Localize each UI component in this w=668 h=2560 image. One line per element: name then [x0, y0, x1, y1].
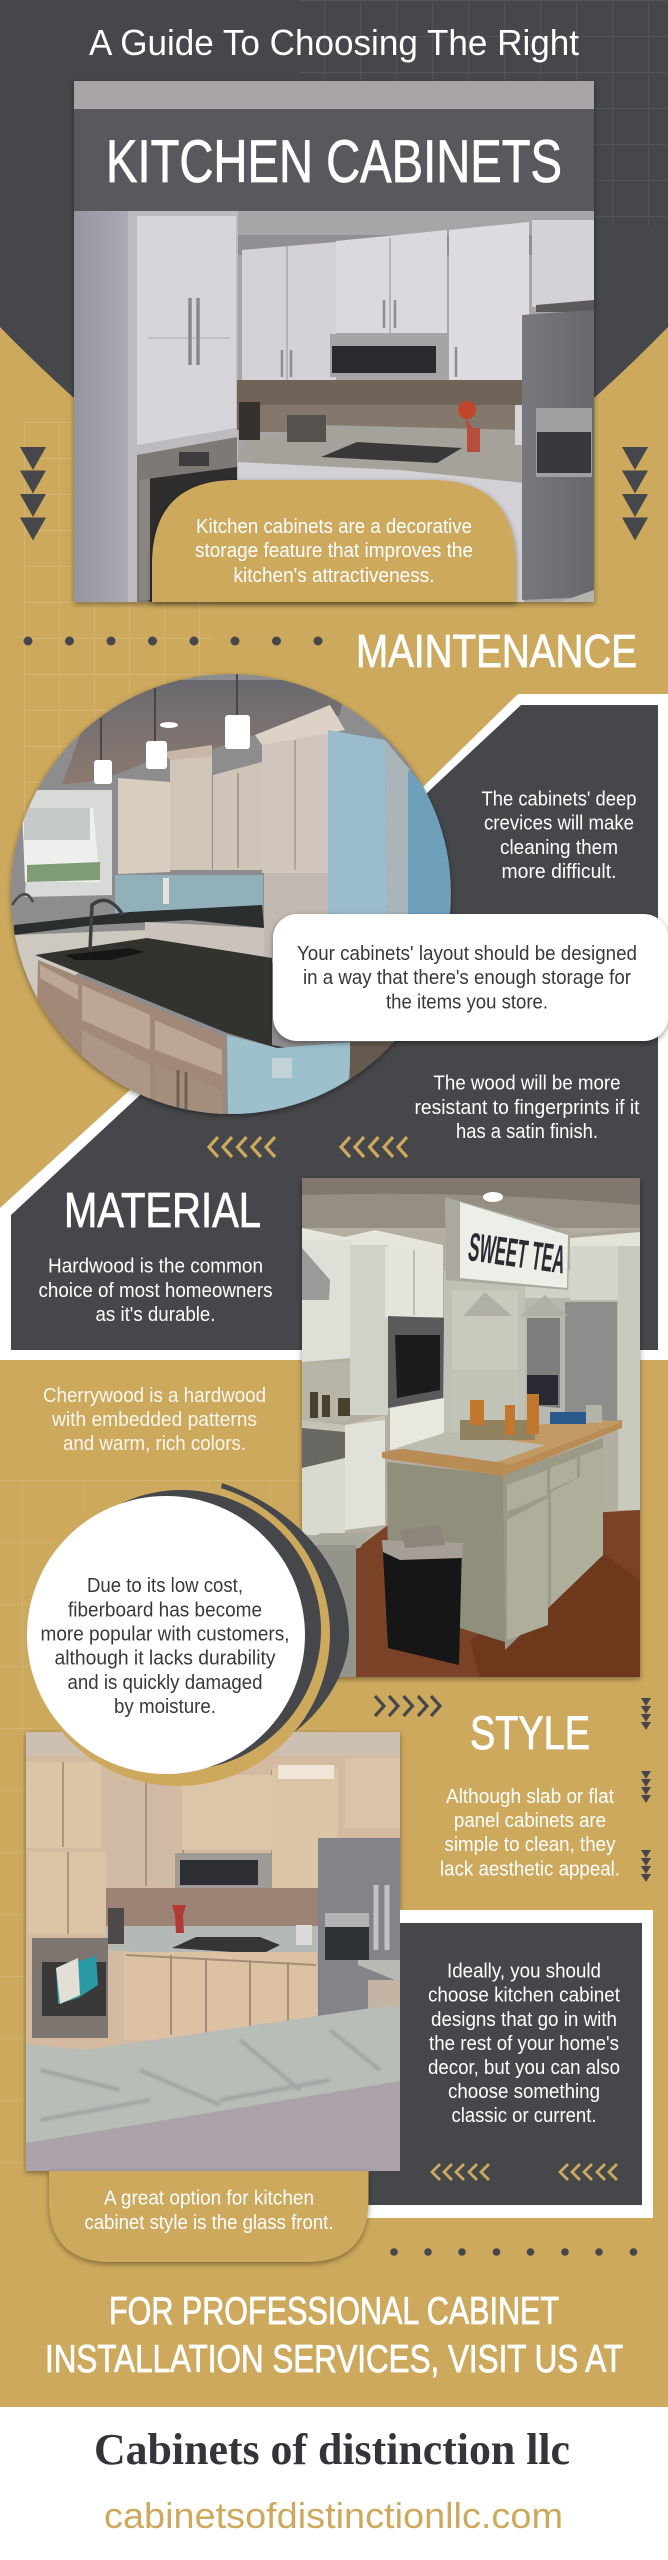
text: satin finish: has a satin finish. — [456, 1121, 598, 1143]
callout: white pill: Your cabinets' layout should be designed — [297, 943, 637, 965]
text: satin finish: The wood will be more — [434, 1073, 620, 1095]
text: deep crevices: crevices will make — [484, 813, 634, 835]
text: ideally: choose something — [448, 2081, 600, 2103]
text: cherrywood — [43, 1385, 266, 1455]
text: deep crevices: more difficult. — [502, 861, 616, 883]
intro pill — [152, 480, 516, 602]
panel: circle crescent gold — [26, 1482, 330, 1786]
text: ideally: Ideally, you should — [447, 1961, 601, 1983]
text: slab panels: simple to clean, they — [444, 1834, 616, 1856]
callout: white pill: the items you store. — [386, 992, 548, 1014]
text: slab panels: Although slab or flat — [446, 1786, 614, 1808]
circle callout: fiberboard: and is quickly damaged — [68, 1672, 262, 1694]
panel: style frame — [362, 1910, 653, 2218]
text: hardwood: Hardwood is the common — [48, 1256, 263, 1278]
panel: dark — [11, 705, 658, 1350]
text: slab panels — [440, 1786, 620, 1880]
text: deep crevices: cleaning them — [500, 837, 618, 859]
callout: white pill: in a way that there's enough storage for — [303, 967, 631, 989]
chevrons: gold in panel 2 — [560, 2164, 617, 2180]
intro pill: kitchen's attractiveness. — [234, 565, 434, 587]
circle callout: fiberboard: more popular with customers, — [40, 1624, 290, 1646]
chevrons: dark right — [375, 1696, 440, 1716]
panel: circle crescent outer dark — [200, 1483, 349, 1733]
footer panel — [0, 2407, 668, 2560]
text: cherrywood: Cherrywood is a hardwood — [43, 1385, 266, 1407]
heading: guide line: A Guide To Choosing The Right — [89, 22, 579, 63]
small triangles stacks — [641, 1698, 651, 1882]
circle callout: fiberboard: although it lacks durability — [54, 1648, 276, 1670]
title band — [74, 109, 594, 211]
call to action — [45, 2290, 623, 2381]
panel: white frame — [0, 694, 668, 1360]
gold pill: glass front: A great option for kitchen — [104, 2188, 314, 2210]
intro pill: storage feature that improves the — [195, 540, 473, 562]
text: hardwood: choice of most homeowners — [38, 1280, 272, 1302]
text: slab panels: lack aesthetic appeal. — [440, 1858, 620, 1880]
text: deep crevices: The cabinets' deep — [482, 789, 636, 811]
chevrons: gold left 2 — [341, 1137, 407, 1157]
dots row lower — [390, 2248, 637, 2256]
photo: white kitchen — [74, 81, 594, 606]
circle callout: fiberboard: by moisture. — [114, 1696, 216, 1718]
website: cabinetsofdistinctionllc.com — [104, 2495, 563, 2536]
heading: material: MATERIAL — [64, 1184, 261, 1238]
chevrons: gold left 1 — [209, 1137, 275, 1157]
heading: style: STYLE — [470, 1706, 590, 1759]
chevrons: gold in panel 1 — [432, 2164, 489, 2180]
text: hardwood: as it's durable. — [96, 1304, 216, 1326]
text: ideally: classic or current. — [452, 2105, 596, 2127]
call to action: FOR PROFESSIONAL CABINET — [109, 2290, 559, 2333]
photo: sweet tea kitchen — [302, 1178, 640, 1677]
triangles right — [622, 447, 648, 540]
text: slab panels: panel cabinets are — [454, 1810, 606, 1832]
callout: white pill — [273, 914, 668, 1041]
text: cherrywood: with embedded patterns — [51, 1409, 257, 1431]
text: ideally: designs that go in with — [431, 2009, 617, 2031]
text: ideally: decor, but you can also — [428, 2057, 620, 2079]
photo: tan kitchen — [26, 1732, 400, 2171]
circle callout: fiberboard: Due to its low cost, — [87, 1575, 243, 1597]
text: satin finish — [414, 1073, 640, 1143]
header: dark curved block — [0, 0, 668, 600]
text: deep crevices — [482, 789, 636, 883]
circle callout: fiberboard: fiberboard has become — [68, 1599, 262, 1621]
intro pill: Kitchen cabinets are a decorative — [196, 516, 472, 538]
text: ideally — [428, 1961, 620, 2127]
company name: Cabinets of distinction llc — [94, 2425, 570, 2474]
text: hardwood — [38, 1256, 272, 1326]
circle callout: fiberboard — [27, 1496, 305, 1774]
gold pill: glass front — [49, 2171, 368, 2262]
dots row — [24, 636, 322, 646]
panel: circle crescent inner dark — [41, 1490, 321, 1770]
photo: kitchen in circle — [10, 672, 451, 1116]
text: ideally: the rest of your home's — [429, 2033, 619, 2055]
text: ideally: choose kitchen cabinet — [428, 1985, 620, 2007]
text: satin finish: resistant to fingerprints if it — [414, 1097, 640, 1119]
gold pill: glass front: cabinet style is the glass front. — [84, 2212, 334, 2234]
text: cherrywood: and warm, rich colors. — [63, 1433, 246, 1455]
triangles left — [20, 447, 46, 540]
